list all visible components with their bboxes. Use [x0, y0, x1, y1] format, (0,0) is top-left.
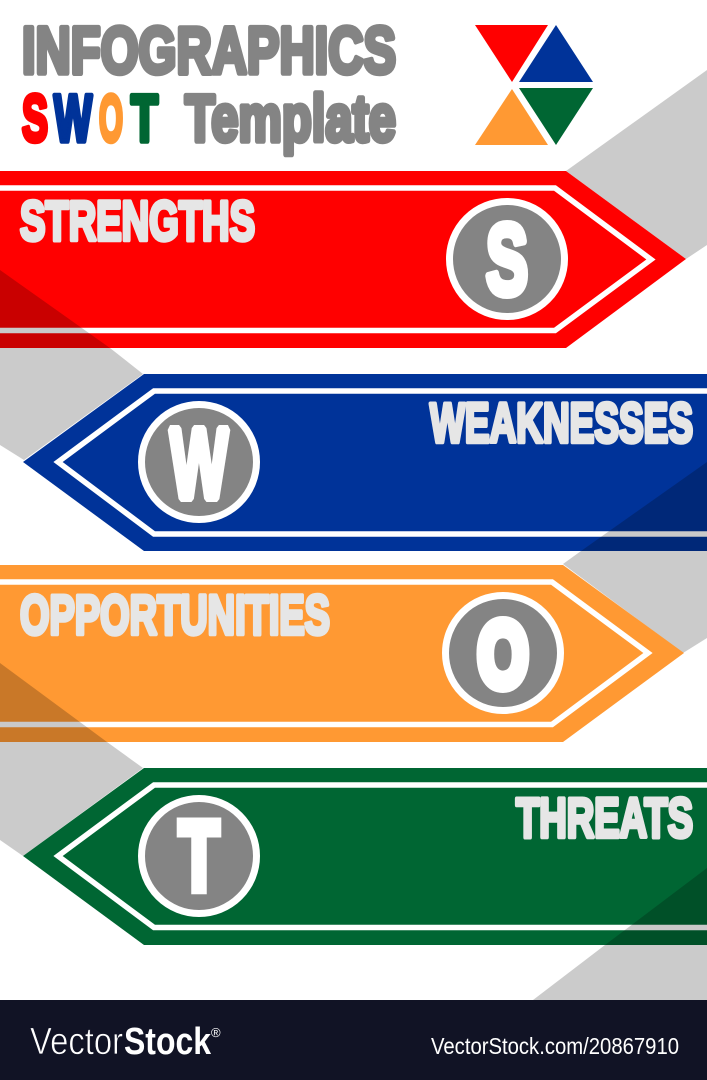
panel: opportunities [0, 565, 684, 742]
icon: S badge [450, 202, 564, 316]
icon: W badge: W [170, 408, 228, 520]
title line: SWOT Template: S [22, 81, 48, 155]
icon: O badge: O [478, 604, 528, 706]
footer bar [0, 1000, 707, 1080]
panel: strengths [0, 171, 686, 348]
icon: T badge [142, 798, 256, 914]
icon: W badge [142, 404, 256, 520]
arrow banner: opportunities [0, 565, 684, 742]
title line: SWOT Template: Template [185, 81, 396, 155]
logo: VectorStock: Stock [124, 1021, 212, 1063]
title line: SWOT Template: T [131, 81, 158, 155]
icon: T badge: T [179, 801, 219, 911]
icon: S badge: S [486, 204, 528, 316]
heading: opportunities: OPPORTUNITIES [20, 583, 330, 646]
icon: O badge [446, 596, 560, 710]
arrow banner: weaknesses [23, 374, 707, 551]
title [22, 13, 396, 155]
panel: weaknesses [23, 374, 707, 551]
icon: SWOT triangles [475, 25, 593, 145]
arrow banner: threats [23, 768, 707, 945]
title line: SWOT Template [22, 81, 396, 155]
logo: VectorStock: Vector [30, 1021, 123, 1063]
title line: SWOT Template: O [99, 81, 123, 155]
logo: VectorStock: ® [211, 1025, 221, 1040]
title line: SWOT Template: W [54, 81, 92, 155]
panel: threats [23, 768, 707, 945]
heading: strengths: STRENGTHS [20, 189, 255, 252]
title line: INFOGRAPHICS: INFOGRAPHICS [22, 13, 396, 87]
logo: VectorStock [30, 1021, 221, 1063]
arrow banner: strengths [0, 171, 686, 348]
footer url: VectorStock.com/20867910 [431, 1033, 679, 1059]
